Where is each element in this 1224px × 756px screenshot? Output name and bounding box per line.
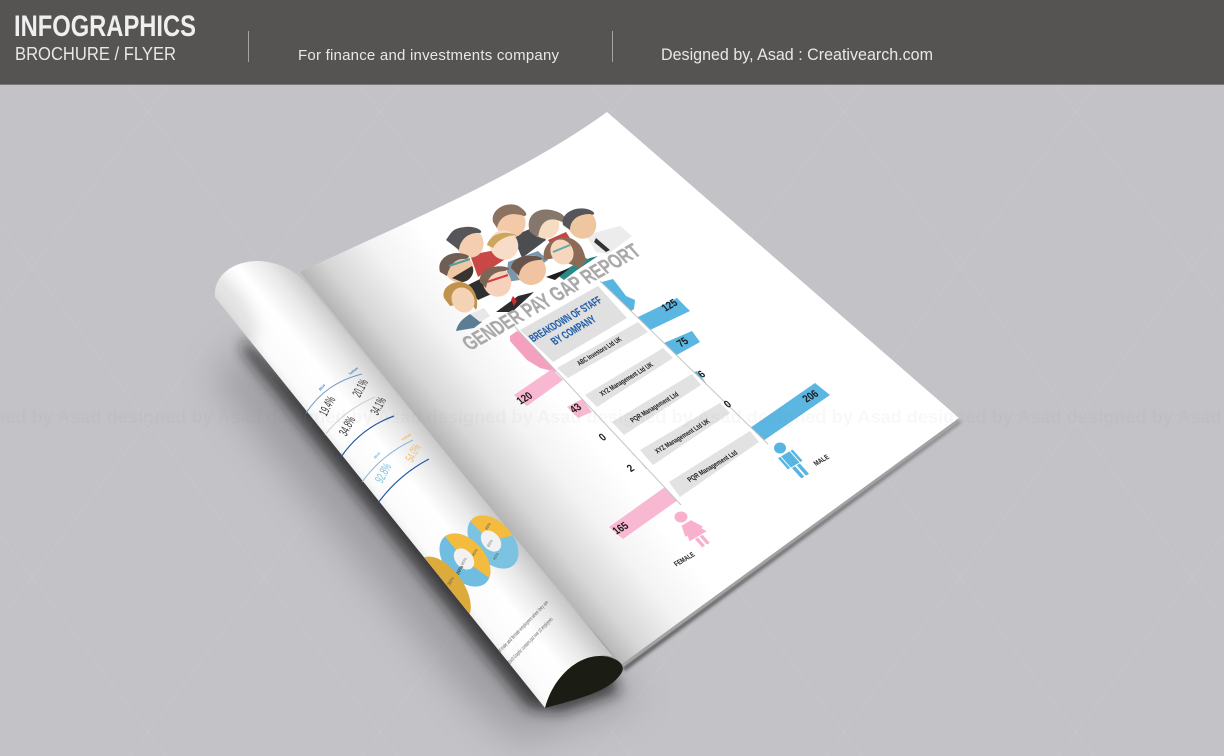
body text on roll: Each Graphic contains just over 10 employees	[507, 617, 555, 665]
table arcs and percentages	[306, 366, 429, 503]
table arcs and percentages: Yellow	[401, 432, 412, 442]
heading: infographics: INFOGRAPHICS	[14, 10, 196, 43]
person: centre man	[511, 250, 570, 290]
bar values: 2	[625, 463, 637, 474]
blue figure silhouette	[598, 279, 635, 313]
donut chart: left partial: 30%	[446, 576, 455, 586]
company row 4: XYZ Management Ltd UK	[653, 417, 712, 455]
bar values: 165	[611, 520, 632, 537]
bar values: 120	[515, 391, 535, 407]
bar values: 206	[801, 389, 821, 405]
bar values: 0	[722, 399, 734, 410]
body text on roll	[497, 600, 555, 665]
icon: male figure	[774, 442, 812, 480]
company row 2	[585, 348, 673, 407]
table arcs and percentages: Blue	[373, 451, 381, 460]
pink figure silhouette	[510, 331, 556, 372]
person: bearded man	[439, 248, 496, 300]
table arcs and percentages: 92.8%	[372, 460, 394, 485]
company row 5	[669, 431, 759, 497]
donut chart: right: 60%	[486, 538, 494, 548]
company row 2: XYZ Management Ltd UK	[598, 360, 655, 398]
bar values: 43	[568, 402, 584, 416]
body text on roll: of male and female employees when they are	[497, 600, 550, 654]
white company panel	[515, 281, 768, 505]
magazine right page	[300, 112, 959, 668]
table arcs and percentages: Yellow	[348, 366, 359, 376]
person: blond man	[484, 225, 548, 282]
donut chart: middle: 40%	[471, 547, 479, 557]
icon: female figure	[674, 512, 715, 550]
panel header: BY COMPANY	[549, 314, 599, 347]
table arcs and percentages: 34.8%	[336, 413, 358, 438]
text: client description: For finance and investments company	[298, 47, 560, 64]
company row 3: PQR Management Ltd	[628, 390, 681, 424]
panel header: BREAKDOWN OF STAFF	[527, 295, 605, 344]
label: female: FEMALE	[672, 550, 697, 568]
person: woman with glasses	[544, 235, 598, 280]
panel header	[520, 286, 627, 362]
donut chart: right	[468, 515, 518, 569]
subheading: brochure: BROCHURE / FLYER	[15, 44, 176, 64]
person: top man	[489, 199, 546, 258]
header bar	[0, 0, 1224, 85]
table arcs and percentages: Blue	[318, 383, 326, 392]
table arcs and percentages: 34.1%	[367, 394, 389, 417]
bar values: 0	[597, 432, 609, 443]
donut chart: right: 40%	[492, 551, 500, 561]
table arcs and percentages: 19.4%	[316, 393, 338, 418]
person: blond long hair	[444, 282, 490, 331]
company row 4	[640, 403, 730, 465]
bars: male	[636, 298, 830, 441]
donut chart: middle: 30%	[455, 564, 466, 576]
donut chart: right: 30%	[484, 521, 492, 531]
label: male: MALE	[811, 453, 831, 467]
portrait group	[439, 199, 632, 331]
donut chart: middle	[440, 533, 490, 587]
bars: female	[514, 369, 678, 539]
company row 1	[557, 322, 648, 378]
bar values: 125	[660, 297, 681, 314]
ground shadow	[215, 338, 961, 740]
title: gender pay gap report: GENDER PAY GAP REPORT	[457, 239, 646, 355]
person: man in red shirt	[446, 221, 510, 277]
donut chart: left partial	[424, 556, 471, 614]
person: man with white coat	[562, 204, 632, 254]
bar values	[515, 297, 821, 537]
company row 1: ABC Investors Ltd UK	[575, 335, 624, 367]
table arcs and percentages: 20.1%	[349, 376, 371, 399]
rolled page	[214, 261, 623, 708]
text: designer credit: Designed by, Asad : Creativearch.com	[661, 45, 933, 64]
bar values: 75	[675, 336, 692, 350]
person: woman top	[525, 204, 575, 256]
company row 5: PQR Management Ltd	[685, 448, 740, 484]
company row 3	[612, 374, 701, 435]
person: man with red glasses	[477, 262, 534, 312]
roll opening	[545, 656, 623, 708]
table arcs and percentages: 54.0%	[402, 441, 424, 464]
bar values: 6	[696, 369, 708, 380]
donut chart: middle: 60%	[460, 556, 468, 566]
